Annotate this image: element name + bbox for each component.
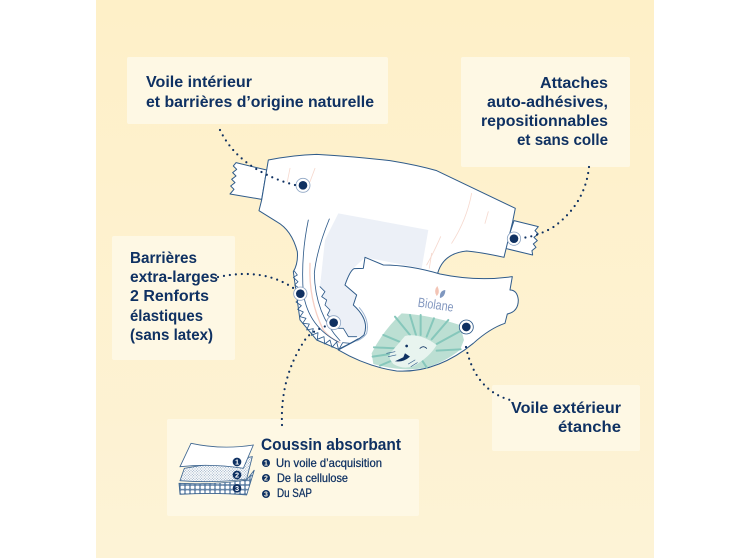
diaper back [259, 154, 515, 349]
list item 1: Un voile d’acquisition [276, 456, 382, 470]
label: barrières: 2 Renforts [130, 288, 209, 305]
core wavy edge [320, 287, 357, 337]
list item 3: Du SAP [277, 486, 312, 500]
leader: attaches [521, 167, 589, 238]
fold accent [357, 308, 367, 341]
icon: absorbent layers: 3 [235, 484, 239, 493]
list item 3: 3 [264, 492, 268, 498]
lion illustration [372, 313, 464, 369]
label: attaches [461, 57, 630, 167]
left tab [230, 163, 267, 199]
list item 3 [262, 486, 312, 500]
diaper front [338, 257, 518, 371]
logo: Biolane [417, 286, 455, 315]
list item 1: 1 [264, 460, 268, 468]
label: attaches: Attaches [540, 75, 608, 92]
label: voile extérieur: Voile extérieur [511, 400, 621, 417]
background panel [96, 0, 654, 558]
leader: voile extérieur [466, 347, 510, 400]
leader lines [218, 130, 589, 425]
label: barrières: élastiques [130, 308, 203, 325]
marker: barrier [294, 287, 307, 300]
logo: Biolane: Biolane [417, 295, 455, 315]
label: attaches: repositionnables [481, 113, 608, 130]
label: voile intérieur: et barrières d’origine naturelle [146, 94, 374, 111]
list item 2: De la cellulose [277, 471, 348, 485]
label: attaches: auto-adhésives, [487, 94, 608, 111]
leader: voile intérieur [220, 130, 295, 185]
marker: core [327, 316, 341, 330]
label: voile intérieur: Voile intérieur [146, 74, 252, 91]
label: barrières: extra-larges [130, 269, 218, 286]
right tab [505, 221, 538, 255]
label: barrières: Barrières [130, 250, 197, 267]
list item 2: 2 [264, 476, 268, 482]
marker: outer layer [459, 320, 473, 334]
pink stretch marks [287, 168, 488, 268]
label: voile extérieur: étanche [558, 419, 621, 436]
marker: tab [507, 232, 521, 245]
label: attaches: et sans colle [517, 132, 608, 149]
label: barrières: (sans latex) [130, 327, 213, 344]
heading: coussin absorbant: Coussin absorbant [261, 435, 401, 454]
icon: absorbent layers: 1 [235, 458, 239, 467]
diaper illustration [230, 154, 538, 371]
label: voile extérieur [492, 385, 640, 451]
label: barrières [112, 236, 235, 360]
leader: coussin [282, 326, 326, 425]
absorbent core [320, 213, 428, 337]
marker: inner layer [296, 178, 310, 192]
label: voile intérieur [127, 57, 388, 124]
icon: absorbent layers: 2 [235, 471, 239, 480]
icon: absorbent layers [179, 443, 254, 495]
ruffled edge [293, 271, 358, 350]
panel: coussin absorbant [167, 419, 419, 516]
leader: barrières [218, 274, 296, 290]
elastic barriers [303, 219, 340, 343]
